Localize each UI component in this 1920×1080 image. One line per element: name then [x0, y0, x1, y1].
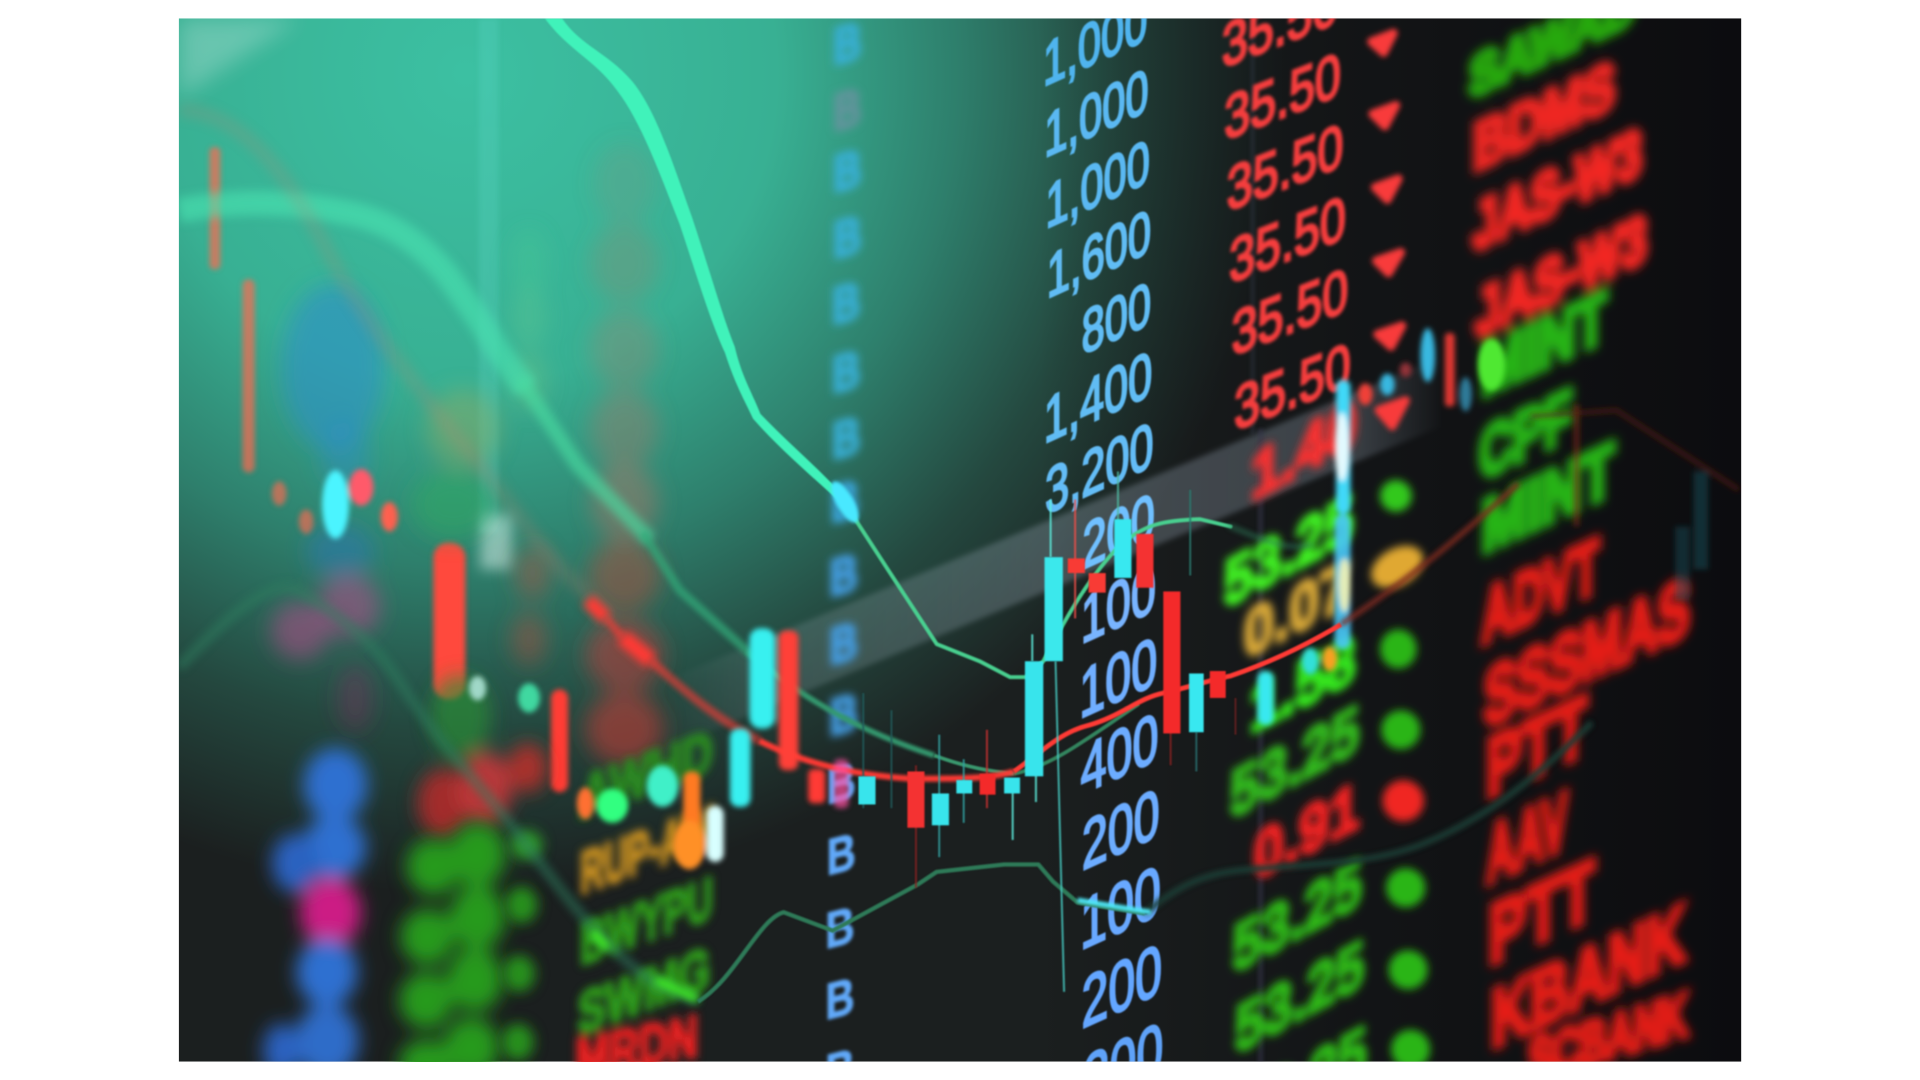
right blurred ticker column: JAS-W3: [1476, 199, 1647, 352]
faint ticker rows over teal area: [411, 142, 664, 765]
candlestick chart: wicks: [863, 471, 1236, 992]
blue volume numbers column: 100: [1080, 850, 1161, 966]
candlestick chart: blurred left candles: [469, 628, 849, 869]
blue B column: B: [831, 469, 859, 534]
blue volume numbers column: 200: [1082, 479, 1155, 583]
left blurred ticker symbols: AWHD: [580, 717, 713, 831]
far-left green blurred column: [399, 823, 542, 1080]
left blurred ticker symbols: SWMG: [578, 934, 710, 1047]
blue B column: B: [830, 542, 858, 608]
blue volume numbers column: 200: [1082, 773, 1160, 885]
right blurred ticker column: MINT: [1482, 275, 1607, 412]
red price column 35.50: 35.50: [1232, 254, 1348, 369]
blue volume numbers column: 1,400: [1044, 337, 1152, 457]
blue B column: B: [833, 138, 861, 203]
cyan highlight on line: [826, 478, 864, 526]
right blurred ticker column: PTT: [1489, 841, 1594, 983]
blue volume numbers column: 3,200: [1045, 408, 1153, 528]
blue B column: [826, 11, 861, 1080]
change value column: 1.58: [1250, 620, 1356, 748]
blue volume numbers column: 1,600: [1047, 197, 1151, 312]
left-middle green and red blurred blobs: [418, 675, 547, 838]
red price column 35.50: 35.50: [1229, 182, 1346, 297]
red price column 35.50: 35.50: [1224, 38, 1341, 153]
change value column: 0.07: [1244, 546, 1349, 674]
status dots column: [1364, 480, 1431, 1069]
change value column: 53.25: [1235, 925, 1364, 1069]
change value column: [1224, 383, 1367, 1080]
change value column: 53.25: [1230, 690, 1359, 834]
change value column: 53.25: [1233, 844, 1362, 988]
blue B column: B: [832, 405, 860, 470]
right blurred ticker column: PTT: [1487, 677, 1587, 816]
left blurred ticker symbols: BWYPU: [580, 864, 713, 977]
blue B column: B: [833, 11, 861, 76]
lower dark green line: [179, 587, 1592, 1002]
blue B column: B: [827, 751, 856, 816]
candlestick chart: sharp candles: [858, 519, 1226, 828]
blue volume numbers column: 1,000: [1046, 127, 1150, 242]
blue B column: B: [827, 822, 856, 887]
right blurred ticker column: SSSMAS: [1484, 560, 1690, 745]
right blurred ticker column: BDMS: [1473, 46, 1615, 186]
left blurred ticker symbols: RUP-AW: [580, 793, 713, 906]
right blurred ticker column: CPF: [1479, 373, 1572, 495]
vertical dotted reflection column: [479, 18, 1264, 1080]
right blurred ticker column: KBANK: [1491, 887, 1685, 1066]
blue volume numbers column: 100: [1081, 551, 1156, 659]
blue B column: B: [830, 611, 858, 676]
red moving-average line: [588, 484, 1518, 779]
blue volume numbers column: 200: [1081, 928, 1162, 1044]
right blurred ticker column: ADVT: [1482, 522, 1599, 660]
blue volume numbers column: 400: [1081, 697, 1158, 809]
red down triangles: [1371, 33, 1406, 426]
blue B column: B: [833, 204, 861, 270]
change value column: 1.40: [1251, 383, 1357, 516]
red price column 35.50: 35.50: [1234, 329, 1351, 444]
change value column: 0.91: [1254, 767, 1359, 895]
blue volume numbers column: 100: [1079, 621, 1157, 733]
blue B column: B: [826, 895, 854, 960]
blue B column: B: [833, 77, 861, 142]
blue volume numbers column: 1,000: [1044, 56, 1149, 171]
red price column 35.50: [1222, 0, 1351, 444]
right blurred ticker column: JAS-W3: [1473, 113, 1642, 265]
blue B column: B: [832, 270, 860, 336]
right blurred ticker column: MINT: [1482, 427, 1614, 570]
top-left light reflection: [179, 18, 300, 98]
blue B column: B: [830, 682, 858, 747]
blue volume numbers column: [1043, 0, 1163, 1080]
change value column: 53.25: [1224, 479, 1353, 623]
far-left faint red candles and dots: [209, 147, 568, 792]
photo: blurred stock market trading screen: [178, 18, 1742, 1062]
faint red moving-average line: [179, 110, 612, 618]
upper-right blurred candles and markers: [1258, 328, 1739, 725]
soft green moving-average line: [179, 203, 1139, 774]
blue B column: B: [832, 339, 860, 404]
diagonal grey highlight band: [702, 368, 1428, 729]
left blurred ticker symbols: [576, 717, 713, 1080]
far-left blurred blue and magenta ticker blobs: [263, 284, 384, 1078]
right blurred ticker column: [1469, 0, 1690, 1080]
red price column 35.50: 35.50: [1227, 109, 1343, 224]
right blurred ticker column: AAV: [1487, 775, 1567, 902]
blue B column: B: [826, 966, 854, 1031]
blue volume numbers column: 800: [1082, 269, 1151, 369]
bright green line: [545, 18, 1310, 677]
